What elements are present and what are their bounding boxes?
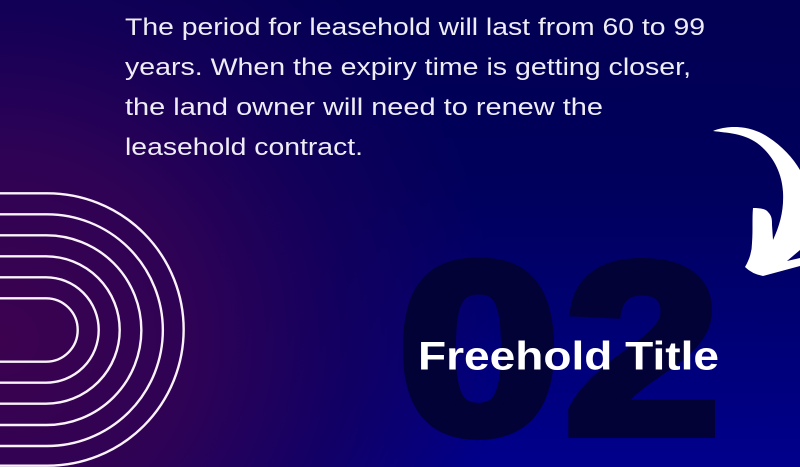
icon: curved white arrow <box>713 127 800 276</box>
body paragraph: the land owner will need to renew the <box>125 94 603 121</box>
body paragraph: leasehold contract. <box>125 134 363 161</box>
decorative concentric rounded lines <box>0 193 184 466</box>
body paragraph <box>125 14 705 161</box>
body paragraph: years. When the expiry time is getting closer, <box>125 54 691 81</box>
large number 02 <box>398 213 720 467</box>
heading: Freehold Title: Freehold Title <box>418 334 719 378</box>
body paragraph: The period for leasehold will last from 60 to 99 <box>125 14 705 41</box>
